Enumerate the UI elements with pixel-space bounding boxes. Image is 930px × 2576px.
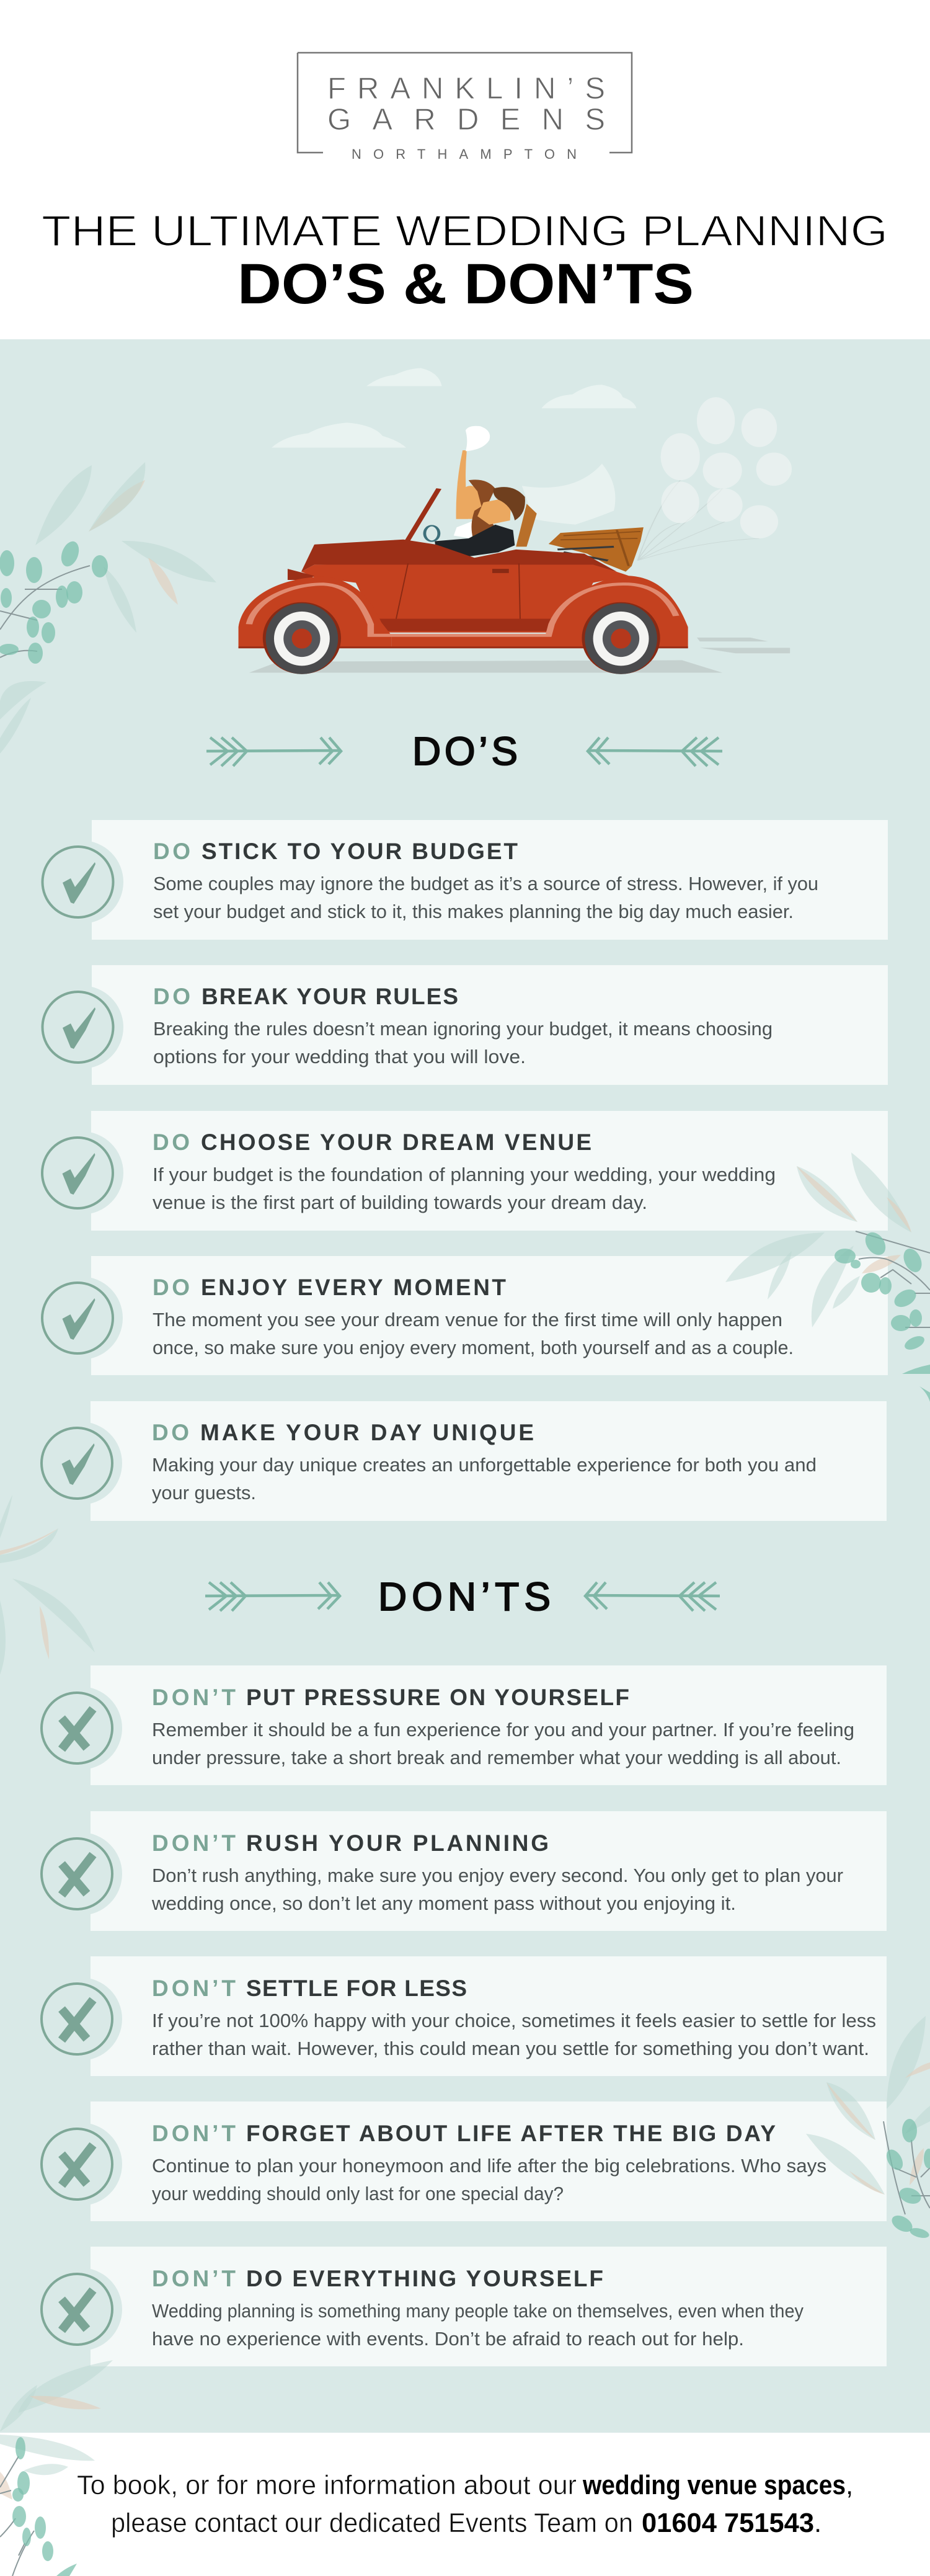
- veil: [522, 463, 615, 525]
- arrow left: [206, 738, 341, 766]
- panel: do choose your dream venue: CHOOSE YOUR DREAM VENUE: [201, 1130, 591, 1155]
- panel: do choose your dream venue: venue is the first part of building towards your dream day.: [153, 1192, 647, 1213]
- panel: don't put pressure on yourself: DON’T: [152, 1685, 236, 1710]
- panel: don't do everything yourself: DON’T: [152, 2266, 236, 2291]
- clouds: [272, 368, 636, 448]
- panel: don't rush your planning: Don’t rush anything, make sure you enjoy every second. You only get to plan your: [152, 1865, 843, 1886]
- wheel: rear: [585, 603, 657, 674]
- title: DO’S & DON’TS: [237, 252, 694, 316]
- arrow left: [205, 1582, 340, 1611]
- panel: do enjoy every moment: [40, 1256, 888, 1375]
- car body: [239, 540, 688, 674]
- logo: FRANKLIN’S: [327, 72, 605, 105]
- heading text: DON’TS: [378, 1574, 551, 1619]
- foliage: lower left: [0, 2360, 113, 2431]
- arrow right: [585, 1582, 720, 1611]
- panel: don't forget about life after the big day: FORGET ABOUT LIFE AFTER THE BIG DAY: [246, 2121, 776, 2146]
- balloons: [637, 397, 792, 561]
- panel: don't rush your planning: DON’T: [152, 1830, 236, 1856]
- foliage: middle left: [0, 1495, 95, 1675]
- panel: don't do everything yourself: DO EVERYTHING YOURSELF: [246, 2266, 603, 2291]
- arrow right: [588, 738, 722, 766]
- shadow and speed lines: [249, 638, 790, 673]
- panel: don't rush your planning: [39, 1811, 887, 1931]
- panel: don't put pressure on yourself: Remember it should be a fun experience for you and your partner. If you’re feeling: [152, 1719, 854, 1740]
- panel: don't settle for less: SETTLE FOR LESS: [246, 1976, 467, 2001]
- panel: don't put pressure on yourself: [39, 1665, 887, 1785]
- groom: [425, 487, 525, 558]
- panel: don't settle for less: If you’re not 100% happy with your choice, sometimes it feels easier to settle for less: [152, 2010, 876, 2031]
- windshield: [406, 489, 439, 543]
- logo: [298, 53, 632, 162]
- panel: don't do everything yourself: have no experience with events. Don’t be afraid to reach out for help.: [152, 2328, 744, 2350]
- footer text: To book, or for more information about our: [77, 2470, 577, 2500]
- foliage: lower right: [806, 2016, 930, 2240]
- panel: do stick to your budget: DO: [153, 839, 190, 864]
- illustration: couple in red car: [239, 368, 792, 674]
- footer text: [77, 2470, 853, 2538]
- section heading: DO'S: [206, 729, 722, 773]
- panel: do stick to your budget: [40, 820, 888, 940]
- title: [42, 207, 888, 316]
- wheel: front: [266, 603, 338, 674]
- panel: do break your rules: DO: [153, 984, 190, 1009]
- footer text: wedding venue spaces: [582, 2470, 846, 2500]
- panel: do break your rules: BREAK YOUR RULES: [202, 984, 458, 1009]
- heading text: DO’S: [412, 729, 518, 773]
- footer text: .: [814, 2508, 822, 2538]
- panel: do choose your dream venue: [40, 1111, 888, 1231]
- panel: don't settle for less: [39, 1956, 887, 2076]
- panel: do break your rules: [40, 965, 888, 1085]
- panel: don't forget about life after the big day: DON’T: [152, 2121, 236, 2146]
- seat: [516, 504, 537, 546]
- panel: don't forget about life after the big day: your wedding should only last for one special day?: [152, 2183, 564, 2204]
- logo: NORTHAMPTON: [352, 146, 577, 162]
- logo: GARDENS: [327, 103, 605, 136]
- panel: do make your day unique: Making your day unique creates an unforgettable experience for both you and: [152, 1454, 817, 1476]
- panel: don't put pressure on yourself: under pressure, take a short break and remember what your wedding is all about.: [152, 1747, 841, 1768]
- panel: do break your rules: Breaking the rules doesn’t mean ignoring your budget, it means choosing: [153, 1018, 773, 1040]
- panel: do choose your dream venue: DO: [153, 1130, 190, 1155]
- panel: don't rush your planning: wedding once, so don’t let any moment pass without you enjoying it.: [151, 1892, 736, 1914]
- panel: do make your day unique: [39, 1401, 887, 1521]
- section heading: DON'TS: [205, 1574, 720, 1619]
- bride: [454, 426, 495, 543]
- panel: don't forget about life after the big day: [39, 2101, 887, 2221]
- panel: do enjoy every moment: DO: [153, 1275, 190, 1300]
- panel: do break your rules: options for your wedding that you will love.: [153, 1046, 526, 1067]
- foliage: footer: [0, 2435, 95, 2576]
- panel: do enjoy every moment: once, so make sure you enjoy every moment, both yourself and as a couple.: [153, 1337, 794, 1358]
- panel: don't settle for less: DON’T: [152, 1976, 236, 2001]
- trunk: [549, 527, 644, 572]
- panel: do enjoy every moment: ENJOY EVERY MOMENT: [201, 1275, 506, 1300]
- panel: don't settle for less: rather than wait. However, this could mean you settle for something you don’t want.: [152, 2038, 869, 2059]
- panel: do stick to your budget: Some couples may ignore the budget as it’s a source of stress. However, if you: [153, 873, 818, 894]
- panel: do enjoy every moment: The moment you see your dream venue for the first time will only happen: [153, 1309, 782, 1330]
- title: THE ULTIMATE WEDDING PLANNING: [42, 207, 888, 255]
- panel: don't put pressure on yourself: PUT PRESSURE ON YOURSELF: [246, 1685, 629, 1710]
- panel: do make your day unique: MAKE YOUR DAY UNIQUE: [200, 1420, 534, 1445]
- footer text: 01604 751543: [642, 2508, 814, 2538]
- footer text: please contact our dedicated Events Team on: [111, 2508, 633, 2538]
- panel: do make your day unique: DO: [152, 1420, 189, 1445]
- panel: do choose your dream venue: If your budget is the foundation of planning your wedding, your wedding: [153, 1164, 776, 1185]
- footer text: ,: [846, 2470, 853, 2500]
- panel: do stick to your budget: set your budget and stick to it, this makes planning the big day much easier.: [153, 901, 794, 922]
- panel: don't forget about life after the big day: Continue to plan your honeymoon and life after the big celebrations. Who says: [152, 2155, 826, 2177]
- foliage: top left: [0, 462, 216, 754]
- panel: don't do everything yourself: Wedding planning is something many people take on themselves, even when they: [152, 2300, 804, 2322]
- panel: do make your day unique: your guests.: [152, 1482, 256, 1504]
- panel: don't do everything yourself: [39, 2247, 887, 2366]
- panel: don't rush your planning: RUSH YOUR PLANNING: [246, 1830, 549, 1856]
- foliage: middle right: [725, 1152, 930, 1402]
- panel: do stick to your budget: STICK TO YOUR BUDGET: [202, 839, 518, 864]
